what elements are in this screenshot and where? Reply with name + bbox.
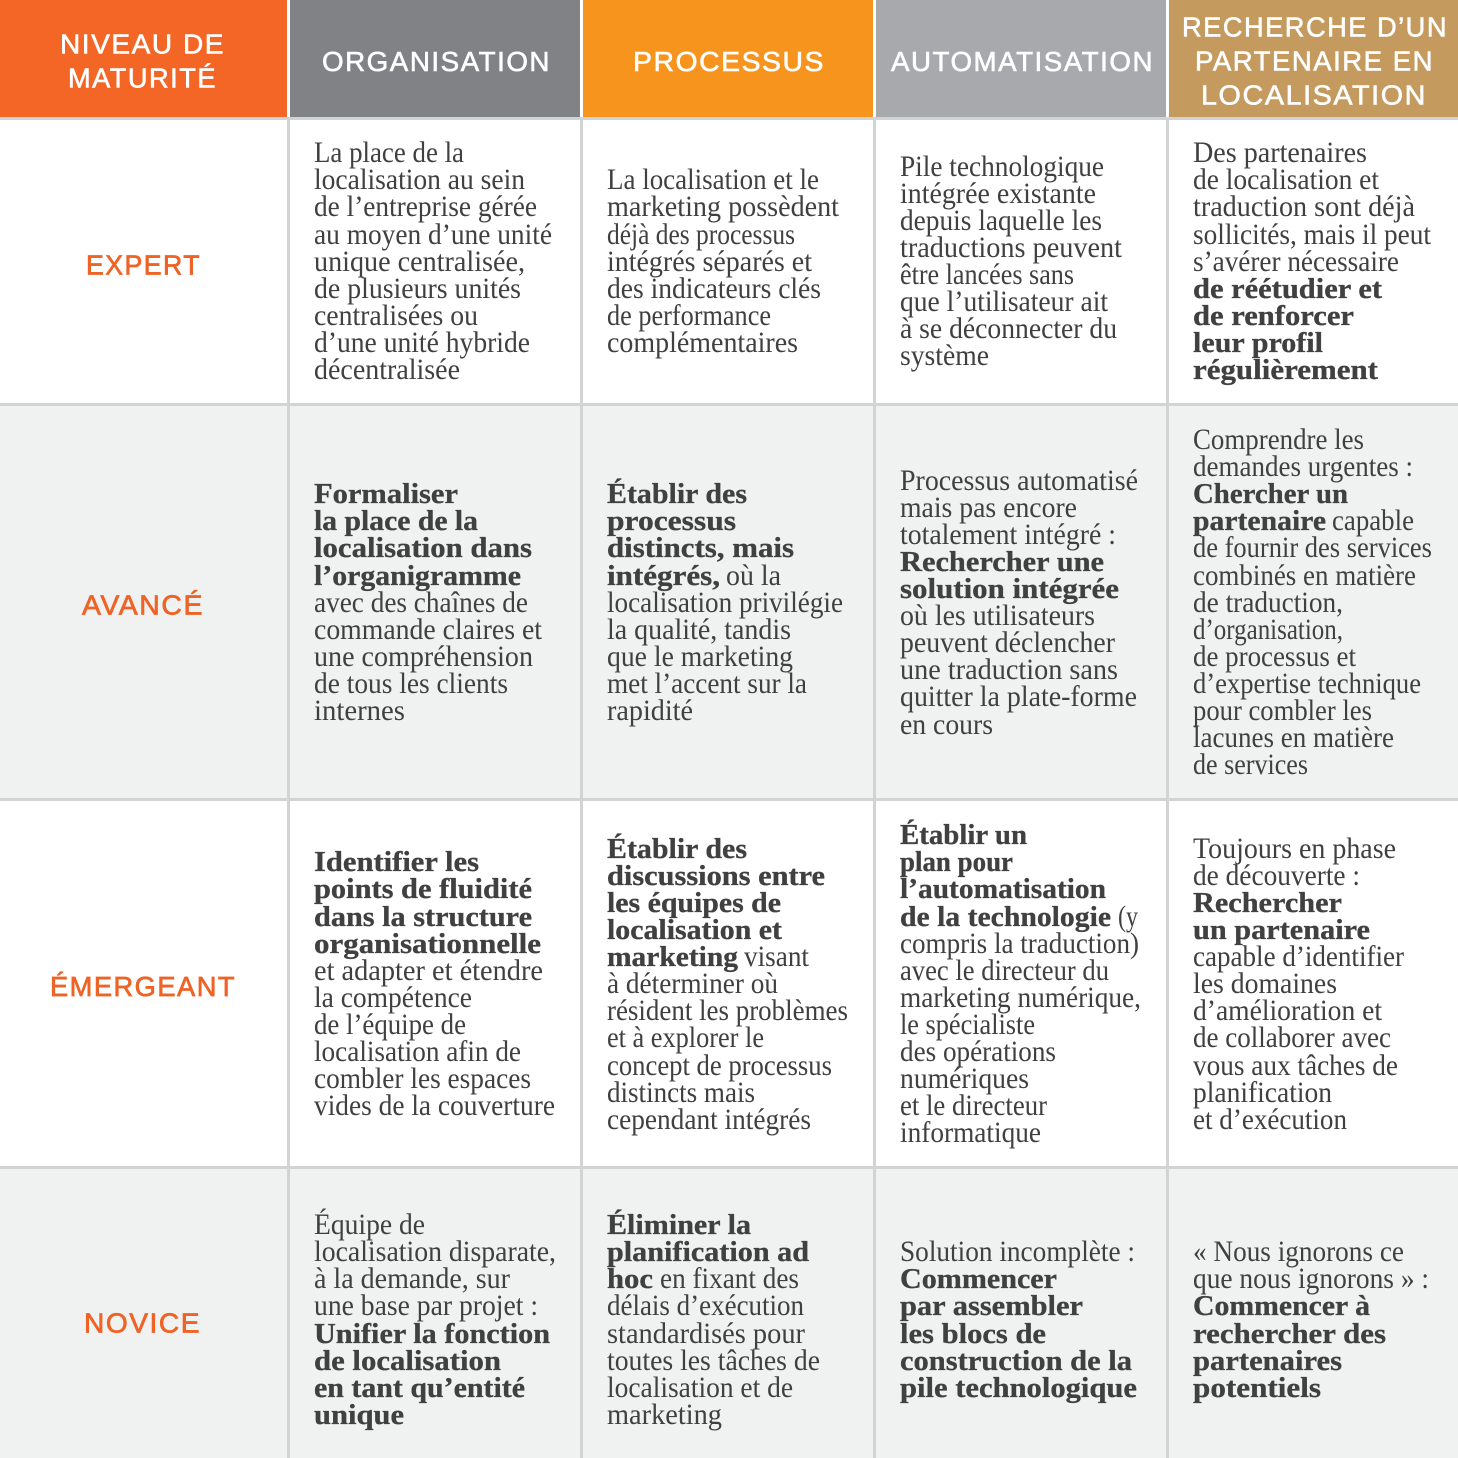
cell: émergeant processus: à déterminer où xyxy=(607,968,778,1000)
cell: avancé organisation: une compréhension xyxy=(314,641,533,673)
header: processus xyxy=(583,0,873,117)
cell: expert automatisation: à se déconnecter du xyxy=(900,313,1117,345)
cell: expert automatisation: depuis laquelle les xyxy=(900,205,1102,237)
cell: émergeant partenaire xyxy=(1193,833,1404,1136)
cell: émergeant automatisation: le spécialiste xyxy=(900,1009,1035,1041)
cell: expert partenaire: sollicités, mais il peut xyxy=(1193,219,1432,251)
cell: avancé partenaire: capable xyxy=(1332,505,1414,537)
cell: avancé organisation: localisation dans xyxy=(314,533,532,564)
cell: avancé partenaire: de traduction, xyxy=(1193,587,1343,619)
cell: novice organisation: Équipe de xyxy=(314,1208,425,1241)
cell: novice processus: Éliminer la xyxy=(607,1210,751,1241)
cell: novice automatisation: Commencer xyxy=(900,1264,1057,1295)
cell: émergeant organisation: et adapter et étendre xyxy=(314,955,543,987)
cell: expert partenaire: Des partenaires xyxy=(1193,137,1367,169)
cell: expert organisation xyxy=(314,137,552,386)
cell: avancé organisation: l’organigramme xyxy=(314,561,521,592)
cell: expert partenaire: leur profil xyxy=(1193,328,1323,359)
cell: avancé processus: la qualité, tandis xyxy=(607,614,791,646)
cell: émergeant processus: distincts mais xyxy=(607,1077,755,1109)
cell: avancé organisation: avec des chaînes de xyxy=(314,587,528,619)
header: organisation xyxy=(290,0,580,117)
row label: novice: NOVICE xyxy=(84,1308,201,1338)
cell: avancé organisation: commande claires et xyxy=(314,614,543,646)
cell: émergeant automatisation: (y xyxy=(1118,901,1138,933)
cell: avancé automatisation: totalement intégré : xyxy=(900,519,1116,551)
cell: novice processus: en fixant des xyxy=(660,1263,799,1295)
cell: avancé processus: où la xyxy=(726,560,781,592)
cell: émergeant processus: discussions entre xyxy=(607,861,825,892)
header: niveau de maturité: NIVEAU DE xyxy=(60,28,225,60)
cell: novice partenaire xyxy=(1193,1236,1429,1404)
cell: expert automatisation xyxy=(900,151,1123,372)
cell: émergeant automatisation: informatique xyxy=(900,1117,1041,1149)
cell: avancé automatisation: en cours xyxy=(900,709,993,741)
cell: émergeant automatisation: plan pour xyxy=(900,847,1013,878)
cell: novice organisation: Unifier la fonction xyxy=(314,1319,550,1350)
cell: émergeant organisation: localisation afin de xyxy=(314,1036,521,1068)
cell: expert automatisation: Pile technologique xyxy=(900,151,1104,183)
cell: novice partenaire: potentiels xyxy=(1193,1373,1321,1404)
cell: expert partenaire: traduction sont déjà xyxy=(1193,191,1415,223)
cell: avancé partenaire: demandes urgentes : xyxy=(1193,451,1413,483)
cell: émergeant partenaire: Toujours en phase xyxy=(1193,833,1396,865)
cell: avancé automatisation: une traduction sans xyxy=(900,654,1118,686)
cell: avancé partenaire: combinés en matière xyxy=(1193,560,1416,592)
cell: émergeant automatisation: avec le directeur du xyxy=(900,955,1109,987)
cell: émergeant partenaire: et d’exécution xyxy=(1193,1104,1347,1136)
cell: novice partenaire: rechercher des xyxy=(1193,1319,1386,1350)
cell: novice processus xyxy=(607,1210,820,1431)
cell: novice partenaire: que nous ignorons » : xyxy=(1193,1263,1429,1295)
cell: expert partenaire: régulièrement xyxy=(1193,355,1379,386)
cell: avancé partenaire xyxy=(1193,424,1432,781)
cell: émergeant organisation: combler les espaces xyxy=(314,1063,531,1095)
cell: expert partenaire xyxy=(1193,137,1432,386)
cell: émergeant partenaire: de découverte : xyxy=(1193,860,1360,892)
cell: émergeant automatisation: marketing numérique, xyxy=(900,982,1141,1014)
cell: émergeant automatisation: de la technologie xyxy=(900,902,1111,933)
cell: expert processus: de performance xyxy=(607,300,771,332)
cell: avancé processus: que le marketing xyxy=(607,641,793,673)
cell: novice processus: marketing xyxy=(607,1399,722,1431)
cell: émergeant processus: Établir des xyxy=(607,834,747,865)
cell: émergeant automatisation: des opérations xyxy=(900,1036,1056,1068)
header: niveau de maturité xyxy=(0,0,287,117)
cell: émergeant processus: et à explorer le xyxy=(607,1022,764,1054)
cell: novice organisation: en tant qu’entité xyxy=(314,1373,525,1404)
cell: émergeant organisation: Identifier les xyxy=(314,847,479,878)
cell: émergeant processus: concept de processus xyxy=(607,1050,832,1082)
cell: expert processus: La localisation et le xyxy=(607,164,819,196)
cell: avancé partenaire: de processus et xyxy=(1193,641,1357,673)
cell: novice automatisation: Solution incomplète : xyxy=(900,1236,1135,1268)
cell: expert automatisation: système xyxy=(900,340,989,372)
cell: expert processus: déjà des processus xyxy=(607,219,795,251)
cell: avancé processus: distincts, mais xyxy=(607,533,794,564)
cell: novice processus: standardisés pour xyxy=(607,1318,805,1350)
cell: émergeant processus: résident les problèmes xyxy=(607,995,848,1027)
cell: expert processus: complémentaires xyxy=(607,327,798,359)
cell: avancé organisation xyxy=(314,479,543,727)
cell: expert organisation: unique centralisée, xyxy=(314,246,525,278)
cell: expert processus xyxy=(607,164,840,359)
cell: novice partenaire: « Nous ignorons ce xyxy=(1193,1236,1404,1268)
cell: émergeant processus: visant xyxy=(744,941,810,973)
cell: expert organisation: localisation au sein xyxy=(314,164,525,196)
cell: émergeant automatisation: et le directeur xyxy=(900,1090,1047,1122)
cell: expert processus: intégrés séparés et xyxy=(607,246,813,278)
header: automatisation: AUTOMATISATION xyxy=(891,46,1154,77)
cell: novice automatisation: les blocs de xyxy=(900,1319,1046,1350)
cell: avancé processus: intégrés, xyxy=(607,561,720,592)
cell: émergeant organisation: de l’équipe de xyxy=(314,1009,466,1041)
row label: émergeant: ÉMERGEANT xyxy=(50,971,236,1002)
header: recherche d'un partenaire en localisation: LOCALISATION xyxy=(1201,80,1427,110)
header: recherche d'un partenaire en localisation xyxy=(1169,0,1458,117)
cell: expert automatisation: être lancées sans xyxy=(900,259,1074,291)
cell: novice partenaire: Commencer à xyxy=(1193,1291,1370,1322)
cell: avancé automatisation: où les utilisateurs xyxy=(900,600,1095,632)
cell: expert partenaire: de localisation et xyxy=(1193,164,1380,196)
cell: expert automatisation: intégrée existante xyxy=(900,178,1096,210)
cell: avancé processus xyxy=(607,479,843,727)
cell: émergeant partenaire: vous aux tâches de xyxy=(1193,1050,1398,1082)
header: recherche d'un partenaire en localisation: RECHERCHE D’UN xyxy=(1182,12,1448,42)
cell: novice organisation: une base par projet : xyxy=(314,1290,538,1322)
cell: émergeant processus: marketing xyxy=(607,942,738,973)
cell: avancé partenaire: Comprendre les xyxy=(1193,424,1364,456)
cell: émergeant organisation: la compétence xyxy=(314,982,472,1014)
cell: émergeant processus: cependant intégrés xyxy=(607,1104,811,1136)
cell: émergeant automatisation: numériques xyxy=(900,1063,1029,1095)
cell: expert organisation: de plusieurs unités xyxy=(314,273,521,305)
cell: avancé processus: processus xyxy=(607,506,736,537)
cell: émergeant organisation: points de fluidité xyxy=(314,874,532,905)
cell: avancé partenaire: d’expertise technique xyxy=(1193,668,1421,700)
cell: émergeant partenaire: capable d’identifier xyxy=(1193,941,1404,973)
cell: expert partenaire: s’avérer nécessaire xyxy=(1193,246,1399,278)
cell: avancé partenaire: Chercher un xyxy=(1193,479,1348,510)
cell: avancé automatisation: peuvent déclencher xyxy=(900,627,1115,659)
cell: émergeant processus xyxy=(607,834,848,1136)
cell: émergeant partenaire: Rechercher xyxy=(1193,888,1342,919)
cell: novice processus: toutes les tâches de xyxy=(607,1345,820,1377)
cell: émergeant partenaire: d’amélioration et xyxy=(1193,995,1383,1027)
cell: expert automatisation: que l’utilisateur ait xyxy=(900,286,1109,318)
cell: avancé processus: rapidité xyxy=(607,695,693,727)
cell: expert automatisation: traductions peuvent xyxy=(900,232,1123,264)
cell: avancé partenaire: lacunes en matière xyxy=(1193,722,1394,754)
cell: émergeant automatisation: l’automatisation xyxy=(900,874,1106,905)
cell: avancé partenaire: pour combler les xyxy=(1193,695,1372,727)
cell: novice automatisation xyxy=(900,1236,1137,1404)
cell: avancé organisation: de tous les clients xyxy=(314,668,508,700)
cell: expert organisation: de l’entreprise gérée xyxy=(314,191,537,223)
cell: émergeant automatisation: compris la traduction) xyxy=(900,928,1139,960)
header: automatisation xyxy=(876,0,1166,117)
cell: émergeant organisation: organisationnelle xyxy=(314,929,541,960)
cell: expert organisation: d’une unité hybride xyxy=(314,327,530,359)
cell: émergeant partenaire: les domaines xyxy=(1193,968,1337,1000)
cell: avancé automatisation: Rechercher une xyxy=(900,547,1104,578)
cell: novice processus: délais d’exécution xyxy=(607,1290,804,1322)
header: niveau de maturité: MATURITÉ xyxy=(68,62,217,94)
cell: avancé processus: localisation privilégie xyxy=(607,587,843,619)
cell: émergeant organisation xyxy=(314,847,555,1122)
cell: novice automatisation: par assembler xyxy=(900,1291,1083,1322)
cell: émergeant partenaire: planification xyxy=(1193,1077,1332,1109)
cell: novice organisation: unique xyxy=(314,1400,404,1431)
cell: novice organisation xyxy=(314,1208,556,1431)
cell: avancé organisation: Formaliser xyxy=(314,479,458,510)
cell: expert processus: marketing possèdent xyxy=(607,191,840,223)
cell: expert organisation: décentralisée xyxy=(314,354,460,386)
header: processus: PROCESSUS xyxy=(633,46,825,77)
cell: avancé automatisation xyxy=(900,465,1138,741)
row label: expert: EXPERT xyxy=(86,250,201,280)
cell: avancé automatisation: quitter la plate-forme xyxy=(900,681,1137,713)
cell: avancé processus: Établir des xyxy=(607,479,747,510)
cell: avancé automatisation: solution intégrée xyxy=(900,574,1119,605)
cell: expert processus: des indicateurs clés xyxy=(607,273,821,305)
cell: novice automatisation: pile technologique xyxy=(900,1373,1137,1404)
cell: avancé automatisation: Processus automatisé xyxy=(900,465,1138,497)
cell: avancé partenaire: de fournir des services xyxy=(1193,532,1432,564)
cell: expert organisation: centralisées ou xyxy=(314,300,478,332)
cell: novice automatisation: construction de la xyxy=(900,1346,1132,1377)
cell: novice organisation: à la demande, sur xyxy=(314,1263,510,1295)
cell: expert organisation: au moyen d’une unité xyxy=(314,219,552,251)
cell: émergeant partenaire: un partenaire xyxy=(1193,915,1370,946)
cell: émergeant automatisation xyxy=(900,820,1141,1149)
cell: émergeant processus: les équipes de xyxy=(607,888,781,919)
cell: émergeant processus: localisation et xyxy=(607,915,783,946)
cell: émergeant organisation: vides de la couverture xyxy=(314,1090,555,1122)
cell: avancé partenaire: d’organisation, xyxy=(1193,614,1343,646)
cell: émergeant organisation: dans la structure xyxy=(314,902,532,933)
cell: avancé partenaire: de services xyxy=(1193,749,1308,781)
header: organisation: ORGANISATION xyxy=(322,46,551,77)
cell: avancé processus: met l’accent sur la xyxy=(607,668,807,700)
cell: avancé partenaire: partenaire xyxy=(1193,506,1326,537)
cell: avancé organisation: la place de la xyxy=(314,506,478,537)
cell: novice processus: localisation et de xyxy=(607,1372,793,1404)
cell: émergeant automatisation: Établir un xyxy=(900,820,1027,851)
cell: expert partenaire: de renforcer xyxy=(1193,301,1354,332)
cell: émergeant partenaire: de collaborer avec xyxy=(1193,1022,1391,1054)
row label: avancé: AVANCÉ xyxy=(82,590,204,620)
cell: expert partenaire: de réétudier et xyxy=(1193,274,1383,305)
header: recherche d'un partenaire en localisation: PARTENAIRE EN xyxy=(1195,46,1434,76)
cell: novice processus: hoc xyxy=(607,1264,653,1295)
cell: avancé automatisation: mais pas encore xyxy=(900,492,1077,524)
cell: novice partenaire: partenaires xyxy=(1193,1346,1342,1377)
cell: expert organisation: La place de la xyxy=(314,137,464,169)
cell: avancé organisation: internes xyxy=(314,695,405,727)
cell: novice organisation: de localisation xyxy=(314,1346,501,1377)
cell: novice organisation: localisation disparate, xyxy=(314,1236,556,1268)
cell: novice processus: planification ad xyxy=(607,1237,809,1268)
